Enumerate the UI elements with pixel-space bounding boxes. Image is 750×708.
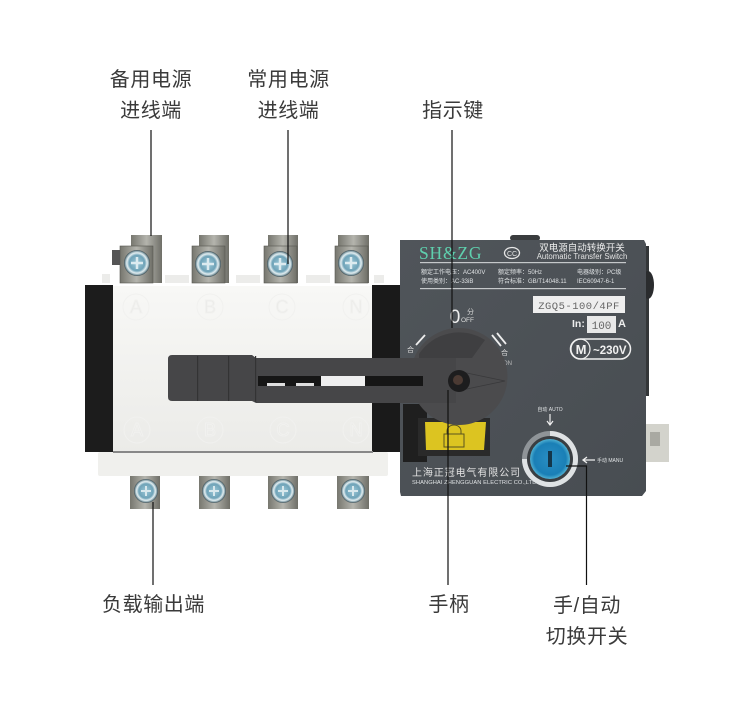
product name: 双电源自动转换开关 [539,242,625,254]
motor voltage badge [570,339,630,359]
specifications: 额定工作电压：AC400V [421,268,485,276]
knob pivot [448,370,470,392]
key switch [522,406,624,487]
top terminals [102,235,384,283]
phase markings: C [276,420,290,440]
specifications: 使用类别：AC-33iB [421,277,473,285]
bottom terminals [130,476,369,509]
phase markings: N [350,420,362,440]
label: load output: 负载输出端 [102,593,205,616]
label: main power input: 进线端 [258,99,319,122]
position I [407,335,425,354]
specifications: IEC60947-6-1 [577,279,615,285]
model plate: ZGQ5-100/4PF [538,301,620,313]
phase markings: N [350,297,362,317]
model plate [533,296,625,313]
padlock tab [403,404,490,462]
handle slot [258,376,423,386]
label: manual auto switch: 手/自动 [553,594,621,617]
right bracket [510,235,669,462]
rated current: A [618,318,626,330]
position II: ON [503,361,512,367]
motor voltage badge: ~230V [593,345,627,357]
rated current: In: [572,318,585,330]
phase markings [123,294,369,443]
position II [492,333,512,367]
position I: 合 [407,345,414,354]
off marker: OFF [461,317,474,324]
breaker body [85,285,402,476]
rated current [572,316,626,333]
position II: 合 [501,348,508,357]
key switch: 自动 AUTO [537,406,563,413]
label: backup power input [110,68,192,122]
company name [412,466,536,486]
label: manual auto switch: 切换开关 [546,625,628,648]
product name [537,242,627,261]
company name: SHANGHAI ZHENGGUAN ELECTRIC CO.,LTD [412,480,536,486]
company name: 上海正冠电气有限公司 [412,466,521,479]
label: main power input [247,68,330,122]
ccc mark: CC [507,251,517,258]
off marker [450,307,474,328]
phase markings: B [204,420,216,440]
product name: Automatic Transfer Switch [537,252,627,261]
phase markings: C [276,297,288,317]
leader lines [151,130,586,585]
label: handle: 手柄 [428,593,470,616]
label: backup power input: 进线端 [120,99,182,122]
phase markings: A [130,297,142,317]
phase markings: A [131,420,143,440]
phase markings: B [204,297,216,317]
control panel [400,240,646,496]
label: indicator key: 指示键 [422,99,484,122]
switch handle [168,355,456,403]
specifications: 额定频率：50Hz [498,268,542,276]
off marker: 0 [450,307,460,328]
specifications: 符合标准：GB/T14048.11 [498,277,567,285]
specifications [421,268,621,285]
specifications: 电器级别：PC级 [577,268,621,276]
rated current: 100 [592,321,611,333]
rotary knob [410,328,507,425]
brand logo: SH&ZG [419,243,482,263]
label: main power input: 常用电源 [247,68,330,91]
key switch: 手动 MANU [597,457,624,464]
off marker: 分 [467,307,474,316]
ccc mark [504,248,520,258]
label: manual auto switch [546,594,628,648]
label: backup power input: 备用电源 [110,68,192,91]
motor voltage badge: M [576,342,586,357]
